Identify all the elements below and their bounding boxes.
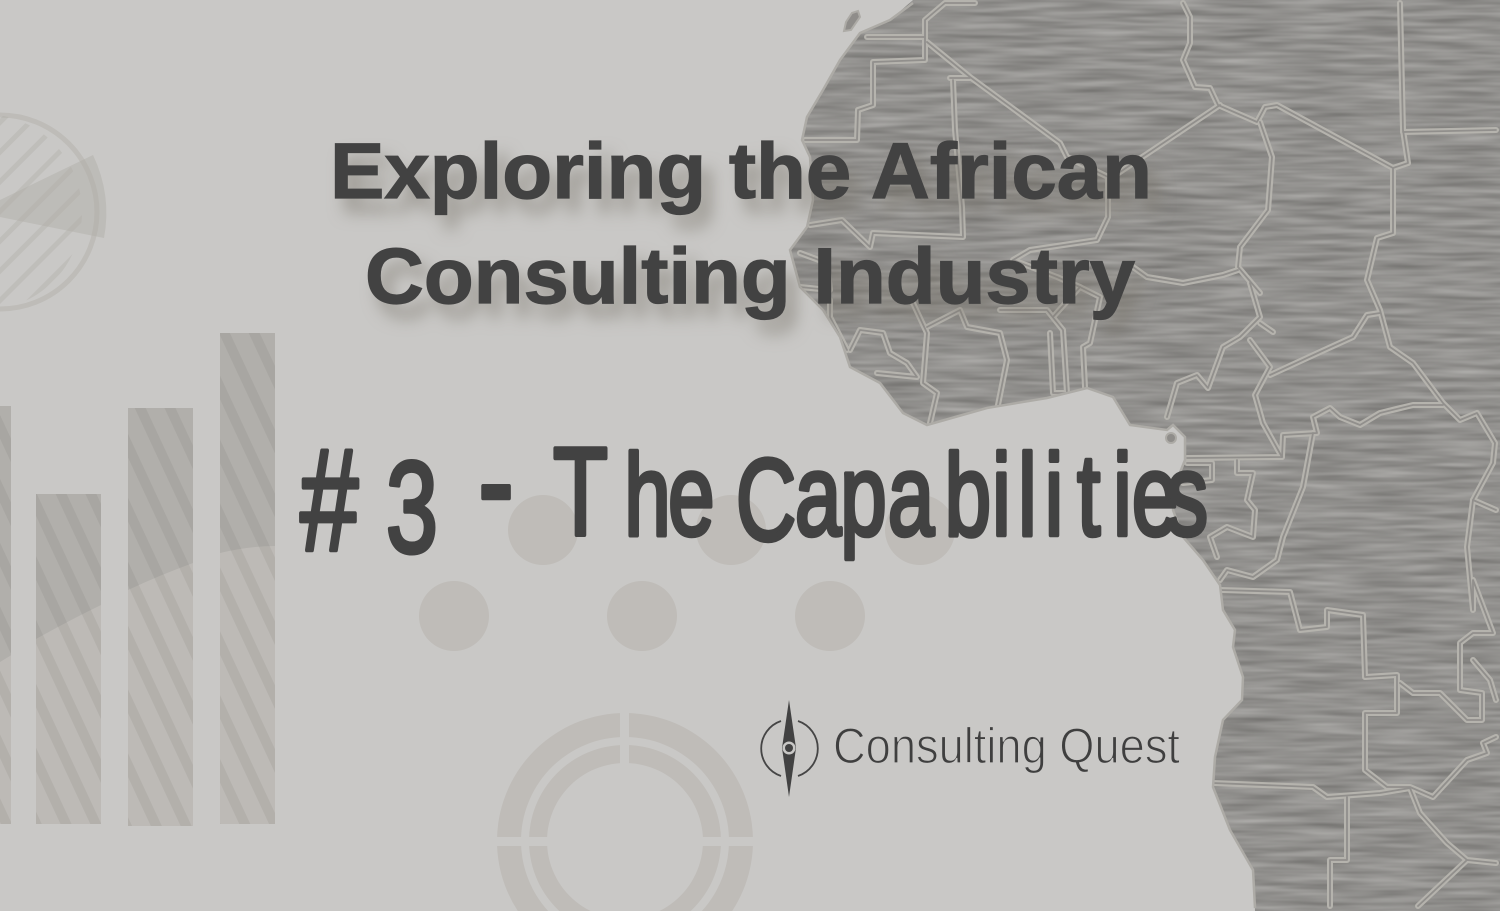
title: Exploring the African — [330, 126, 1152, 215]
decorative pie chart — [0, 110, 106, 315]
map of West and Central Africa — [780, 0, 1500, 911]
subtitle: he — [624, 432, 715, 560]
title: Consulting Industry — [365, 231, 1135, 320]
subtitle: # — [300, 419, 358, 581]
icon: compass — [761, 700, 818, 797]
logo wordmark: Consulting Quest — [833, 718, 1180, 774]
decorative dots — [419, 495, 955, 651]
title — [330, 126, 1152, 320]
subtitle: C — [736, 437, 796, 565]
logo: Consulting Quest — [761, 700, 1180, 797]
decorative ring — [490, 700, 760, 911]
subtitle: 3 — [386, 435, 438, 581]
subtitle: T — [553, 423, 608, 563]
subtitle: - — [478, 397, 514, 564]
decorative bar chart — [0, 333, 275, 826]
subtitle: apabilities — [795, 432, 1208, 560]
